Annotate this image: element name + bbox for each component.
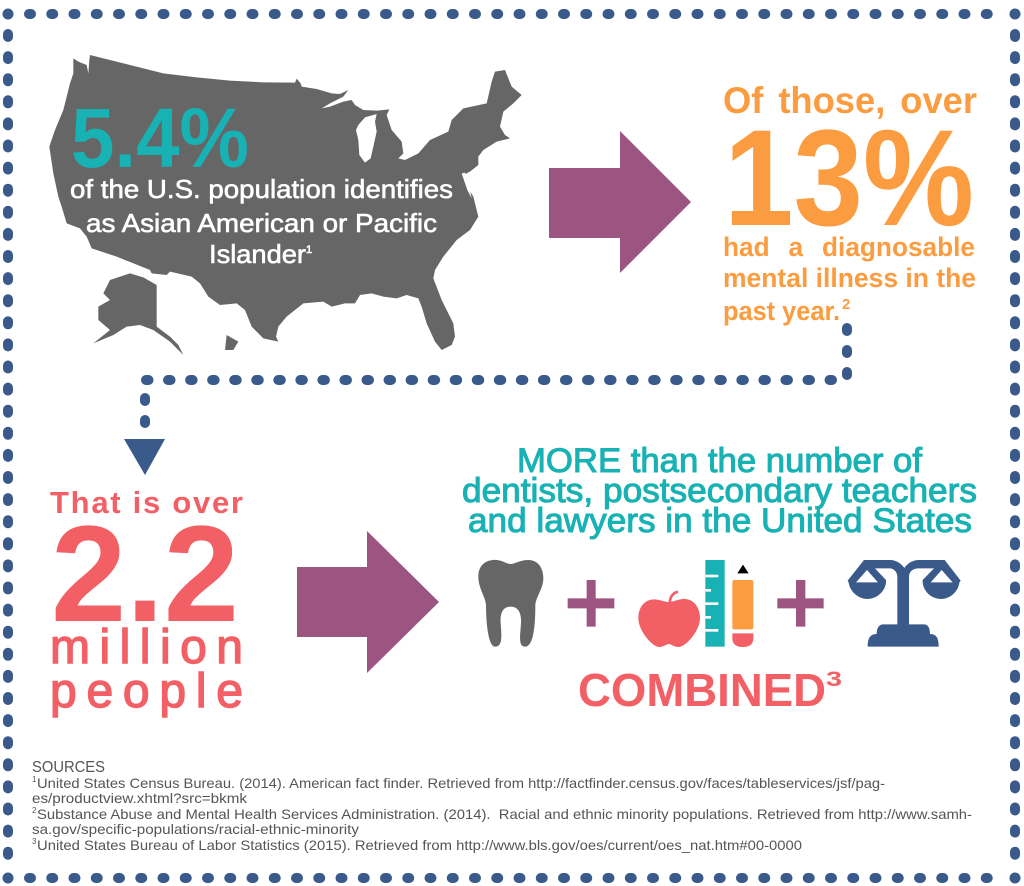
panel: US population <box>49 55 522 355</box>
icon: pencil <box>732 565 753 647</box>
description text: 1 <box>306 244 312 256</box>
description text <box>723 232 976 326</box>
statistic: 13%: 13% <box>724 102 974 255</box>
million: million <box>50 621 243 674</box>
source list: 2 <box>32 806 37 815</box>
icon row <box>478 560 961 647</box>
statistic: 5.4%: 5.4% <box>71 91 249 185</box>
panel: comparison <box>462 442 977 716</box>
icon: apple <box>638 592 700 647</box>
comparison heading: and lawyers in the United States <box>468 502 972 540</box>
combined label: COMBINED <box>578 664 826 716</box>
source list: sa.gov/specific-populations/racial-ethnic-minority <box>32 821 359 837</box>
source list <box>32 775 972 853</box>
description text: mental illness in the <box>723 263 976 293</box>
arrow: dotted connector <box>124 328 847 475</box>
description text: had a diagnosable <box>723 232 975 262</box>
source list: 3 <box>32 837 37 846</box>
map of the United States <box>49 55 522 355</box>
icon: plus <box>568 580 614 627</box>
source list: United States Census Bureau. (2014). American fact finder. Retrieved from http://factfinder.census.gov/faces/tableservices/jsf/pag- <box>37 775 885 791</box>
panel: 13% mental illness <box>723 80 977 326</box>
combined label: 3 <box>826 668 842 691</box>
arrow: to comparison <box>297 531 439 673</box>
panel: 2.2 million people <box>50 485 243 718</box>
statistic: 2.2: 2.2 <box>51 498 239 651</box>
source list: United States Bureau of Labor Statistics (2015). Retrieved from http://www.bls.gov/oes/current/oes_nat.htm#00-0000 <box>37 837 802 853</box>
icon: plus <box>777 580 824 627</box>
description text: 2 <box>842 296 850 313</box>
description text: as Asian American or Pacific <box>86 208 437 238</box>
arrow: to 13% <box>549 131 691 273</box>
sources heading: SOURCES <box>32 759 105 776</box>
icon: ruler <box>705 560 725 647</box>
source list: 1 <box>32 775 37 784</box>
people: people <box>50 665 243 718</box>
description text: past year. <box>723 296 840 326</box>
source list: Substance Abuse and Mental Health Services Administration. (2014). Racial and ethnic minority populations. Retrieved from http://www.samh- <box>37 806 972 822</box>
comparison heading: MORE than the number of <box>517 442 923 480</box>
source list: es/productview.xhtml?src=bkmk <box>32 790 248 806</box>
description text <box>70 174 453 269</box>
sources <box>32 759 972 853</box>
lead-in heading: That is over <box>50 485 243 520</box>
lead-in heading: Of those, over <box>723 80 977 121</box>
icon: tooth <box>478 560 543 647</box>
description text: Islander <box>209 239 306 269</box>
icon: scales of justice <box>848 560 961 647</box>
comparison heading <box>462 442 977 540</box>
description text: of the U.S. population identifies <box>70 174 453 204</box>
comparison heading: dentists, postsecondary teachers <box>462 472 977 510</box>
